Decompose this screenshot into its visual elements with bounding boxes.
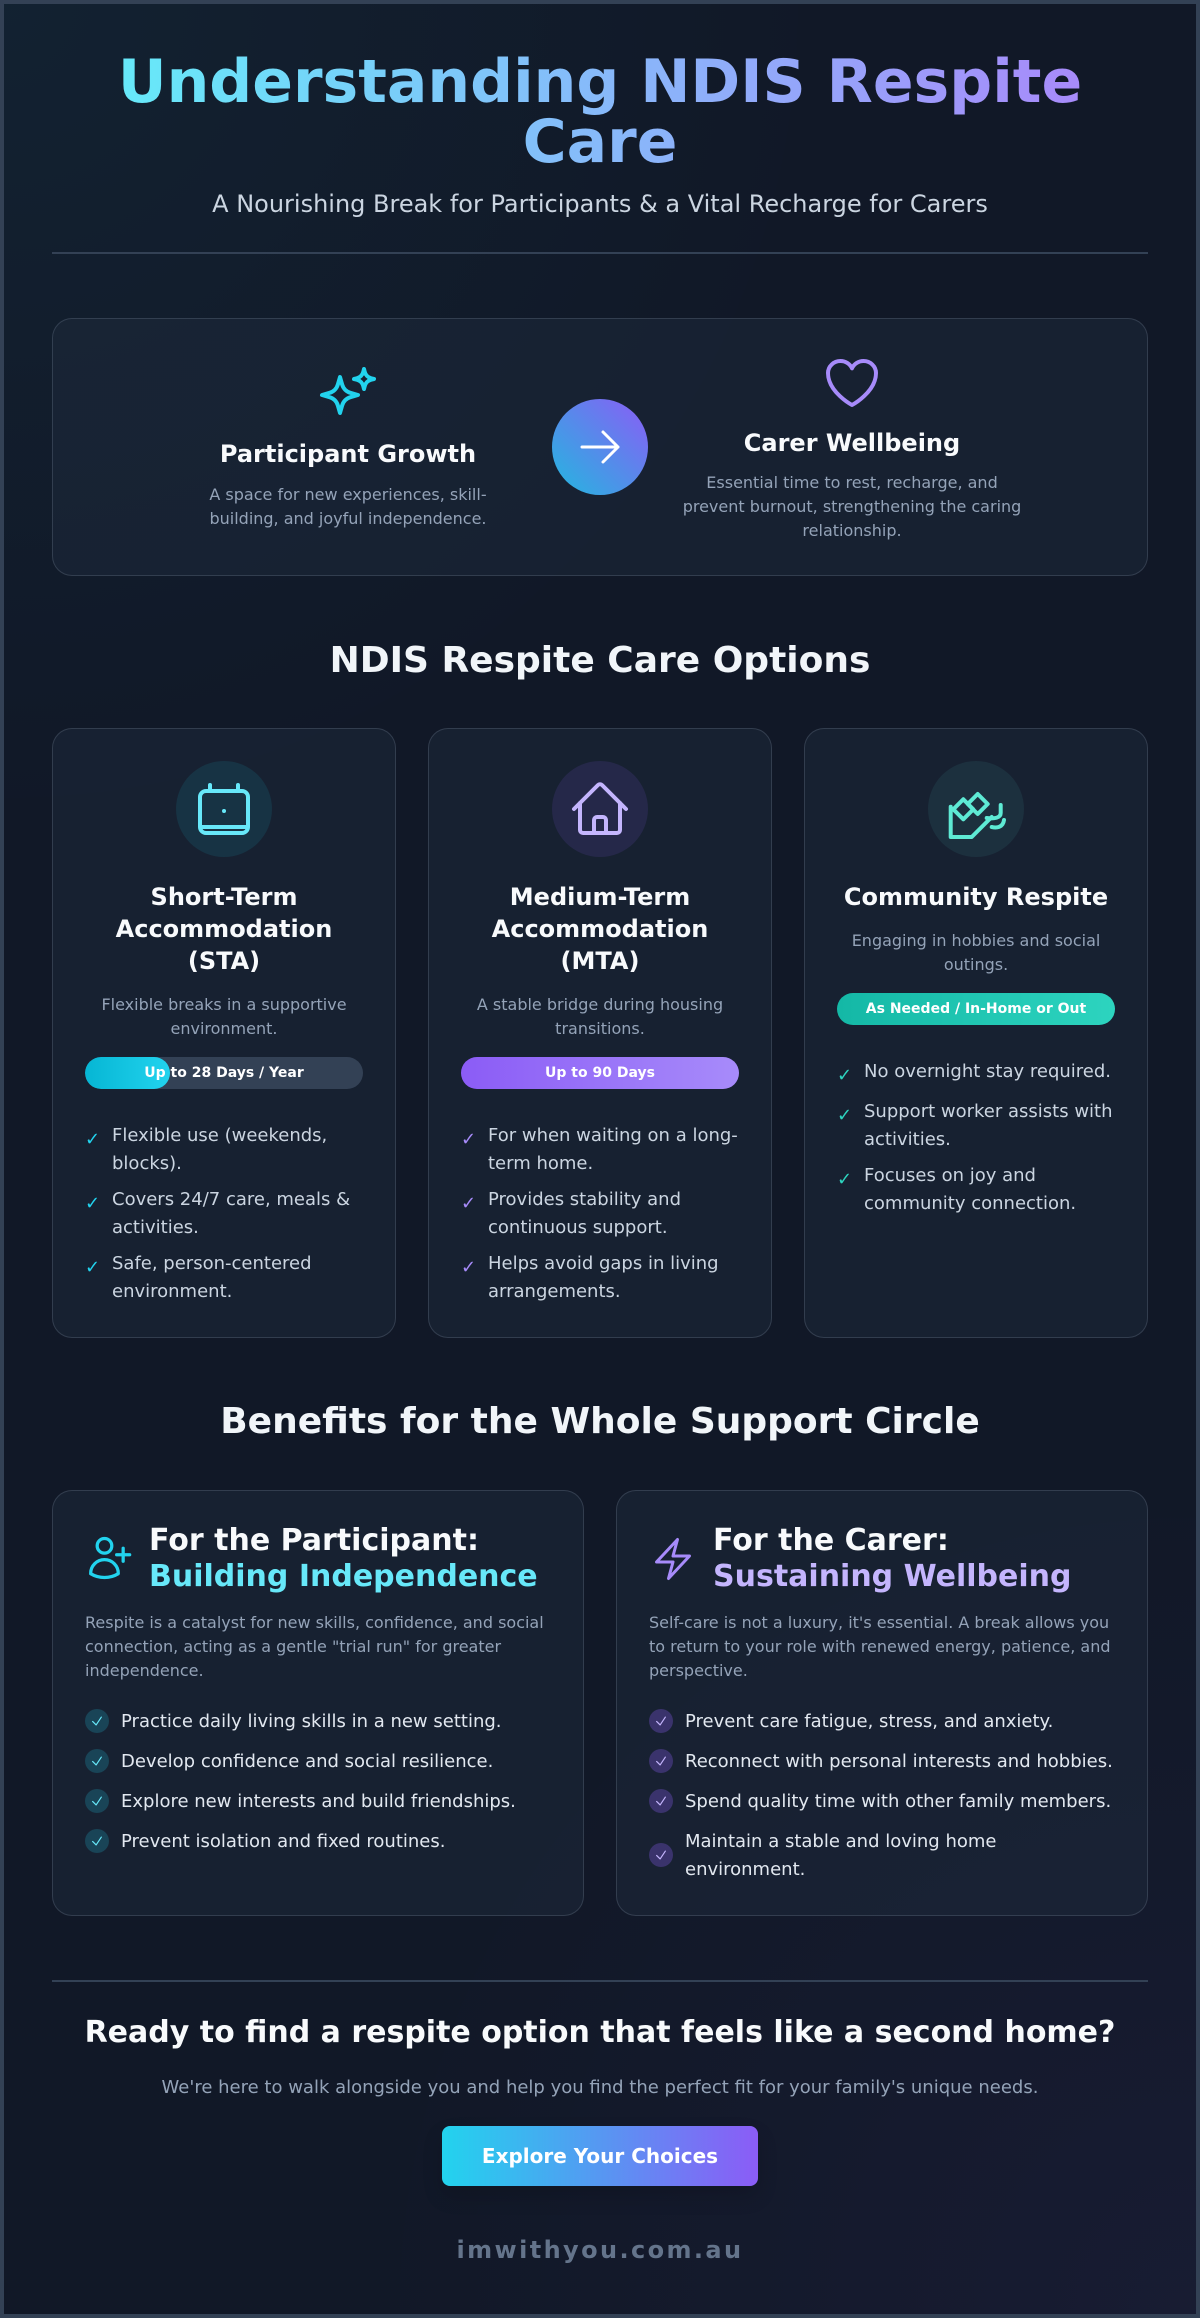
list: STA features: environment. bbox=[112, 1281, 232, 1302]
text: carer description: Self-care is not a luxury, it's essential. A break allows you bbox=[649, 1613, 1109, 1632]
heading: STA bbox=[116, 883, 332, 975]
text: MTA description: A stable bridge during housing bbox=[477, 995, 723, 1014]
text: participant growth description: building, and joyful independence. bbox=[209, 509, 487, 528]
list: MTA features: Helps avoid gaps in living bbox=[488, 1253, 719, 1274]
badge: community frequency bbox=[837, 993, 1115, 1025]
heading: STA: Accommodation bbox=[116, 915, 332, 943]
text: STA description: environment. bbox=[170, 1019, 277, 1038]
list: STA features: activities. bbox=[112, 1217, 199, 1238]
text: MTA description: transitions. bbox=[555, 1019, 645, 1038]
text: carer wellbeing description: relationship. bbox=[802, 521, 902, 540]
text: carer wellbeing description bbox=[683, 473, 1021, 540]
list: MTA features: ✓ bbox=[461, 1193, 476, 1214]
list: carer benefits bbox=[649, 1709, 1113, 1880]
text: community description: outings. bbox=[944, 955, 1008, 974]
list: community features: Support worker assists with bbox=[864, 1101, 1113, 1122]
heading: MTA: Accommodation bbox=[492, 915, 708, 943]
text: participant growth description bbox=[209, 485, 487, 528]
heading: for the participant bbox=[149, 1523, 538, 1594]
list: community features: ✓ bbox=[837, 1105, 852, 1126]
heading: MTA: (MTA) bbox=[561, 947, 639, 975]
title: Understanding NDIS Respite bbox=[118, 47, 1082, 117]
list: MTA features bbox=[461, 1125, 738, 1302]
list: carer benefits: Spend quality time with other family members. bbox=[685, 1791, 1111, 1812]
heading: MTA: Medium-Term bbox=[510, 883, 690, 911]
badge: community frequency: As Needed / In-Home or Out bbox=[866, 1001, 1086, 1017]
panel: carer benefits bbox=[616, 1490, 1148, 1916]
icon: bolt bbox=[655, 1538, 691, 1580]
text: participant description: Respite is a catalyst for new skills, confidence, and social bbox=[85, 1613, 544, 1632]
list: STA features: Covers 24/7 care, meals & bbox=[112, 1189, 350, 1210]
list: MTA features: Provides stability and bbox=[488, 1189, 681, 1210]
heading: community: Community Respite bbox=[844, 883, 1108, 911]
list: STA features: ✓ bbox=[85, 1257, 100, 1278]
panel: participant benefits bbox=[52, 1490, 584, 1916]
list: MTA features: arrangements. bbox=[488, 1281, 621, 1302]
panel: STA bbox=[52, 728, 396, 1338]
text: MTA description bbox=[477, 995, 723, 1038]
list: STA features: Safe, person-centered bbox=[112, 1253, 312, 1274]
heading: options: NDIS Respite Care Options bbox=[330, 640, 870, 681]
list: carer benefits: environment. bbox=[685, 1859, 805, 1880]
icon: user plus bbox=[89, 1536, 132, 1580]
title: Care bbox=[523, 107, 677, 177]
badge: MTA duration bbox=[461, 1057, 739, 1089]
list: MTA features: term home. bbox=[488, 1153, 593, 1174]
list: participant benefits bbox=[85, 1709, 516, 1853]
text: carer description: to return to your role with renewed energy, patience, and bbox=[649, 1637, 1111, 1656]
icon: arrow circle bbox=[552, 399, 648, 495]
icon: heart bbox=[826, 359, 878, 407]
text: participant growth description: A space for new experiences, skill- bbox=[209, 485, 487, 504]
text: community description: Engaging in hobbies and social bbox=[852, 931, 1100, 950]
heading: carer wellbeing: Carer Wellbeing bbox=[744, 429, 960, 457]
text: carer description bbox=[649, 1613, 1111, 1680]
heading: for the participant: For the Participant: bbox=[149, 1523, 479, 1558]
list: STA features: Flexible use (weekends, bbox=[112, 1125, 327, 1146]
footer: website: imwithyou.com.au bbox=[456, 2236, 744, 2264]
list: STA features: ✓ bbox=[85, 1129, 100, 1150]
list: community features bbox=[837, 1061, 1113, 1214]
list: STA features: ✓ bbox=[85, 1193, 100, 1214]
button: explore your choices bbox=[442, 2126, 758, 2186]
text: call to action description: We're here to walk alongside you and help you find the perfect fit for your family's unique needs. bbox=[162, 2077, 1038, 2098]
heading: STA: (STA) bbox=[188, 947, 260, 975]
text: carer wellbeing description: Essential time to rest, recharge, and bbox=[706, 473, 998, 492]
heading: for the carer: Sustaining Wellbeing bbox=[713, 1559, 1071, 1594]
list: MTA features: ✓ bbox=[461, 1257, 476, 1278]
text: participant description bbox=[85, 1613, 544, 1680]
text: carer description: perspective. bbox=[649, 1661, 748, 1680]
list: community features: activities. bbox=[864, 1129, 951, 1150]
title bbox=[52, 52, 1148, 174]
list: participant benefits: Prevent isolation and fixed routines. bbox=[121, 1831, 445, 1852]
panel: community bbox=[804, 728, 1148, 1338]
subtitle: A Nourishing Break for Participants & a Vital Recharge for Carers bbox=[212, 190, 988, 218]
heading: for the carer: For the Carer: bbox=[713, 1523, 949, 1558]
panel: MTA bbox=[428, 728, 772, 1338]
list: MTA features: ✓ bbox=[461, 1129, 476, 1150]
list: STA features bbox=[85, 1125, 350, 1302]
list: community features: ✓ bbox=[837, 1065, 852, 1086]
text: carer wellbeing description: prevent burnout, strengthening the caring bbox=[683, 497, 1021, 516]
heading: STA: Short-Term bbox=[151, 883, 297, 911]
heading: call to action: Ready to find a respite option that feels like a second home? bbox=[85, 2015, 1115, 2050]
button: explore your choices: Explore Your Choices bbox=[482, 2144, 718, 2168]
icon: calendar bbox=[176, 761, 272, 857]
list: MTA features: continuous support. bbox=[488, 1217, 668, 1238]
icon: sparkles bbox=[320, 367, 376, 415]
list: participant benefits: Practice daily living skills in a new setting. bbox=[121, 1711, 502, 1732]
text: community description bbox=[852, 931, 1100, 974]
heading: participant growth: Participant Growth bbox=[220, 440, 476, 468]
icon: house bbox=[552, 761, 648, 857]
list: carer benefits: Maintain a stable and loving home bbox=[685, 1831, 996, 1852]
heading: MTA bbox=[492, 883, 708, 975]
list: STA features: blocks). bbox=[112, 1153, 182, 1174]
heading: benefits: Benefits for the Whole Support Circle bbox=[220, 1401, 980, 1442]
badge: MTA duration: Up to 90 Days bbox=[545, 1065, 655, 1081]
text: participant description: independence. bbox=[85, 1661, 204, 1680]
list: MTA features: For when waiting on a long- bbox=[488, 1125, 738, 1146]
heading: for the participant: Building Independence bbox=[149, 1559, 538, 1594]
badge: STA duration bbox=[85, 1057, 363, 1089]
list: community features: ✓ bbox=[837, 1169, 852, 1190]
list: carer benefits: Reconnect with personal interests and hobbies. bbox=[685, 1751, 1113, 1772]
text: participant description: connection, acting as a gentle "trial run" for greater bbox=[85, 1637, 501, 1656]
list: community features: community connection. bbox=[864, 1193, 1076, 1214]
list: carer benefits: Prevent care fatigue, stress, and anxiety. bbox=[685, 1711, 1053, 1732]
text: STA description bbox=[101, 995, 347, 1038]
text: STA description: Flexible breaks in a supportive bbox=[101, 995, 347, 1014]
list: community features: Focuses on joy and bbox=[864, 1165, 1036, 1186]
panel: hero participant and carer bbox=[52, 318, 1148, 576]
list: participant benefits: Develop confidence and social resilience. bbox=[121, 1751, 493, 1772]
heading: for the carer bbox=[713, 1523, 1071, 1594]
list: community features: No overnight stay required. bbox=[864, 1061, 1111, 1082]
badge: STA duration: Up to 28 Days / Year bbox=[144, 1065, 304, 1081]
list: participant benefits: Explore new interests and build friendships. bbox=[121, 1791, 516, 1812]
icon: puzzle bbox=[928, 761, 1024, 857]
